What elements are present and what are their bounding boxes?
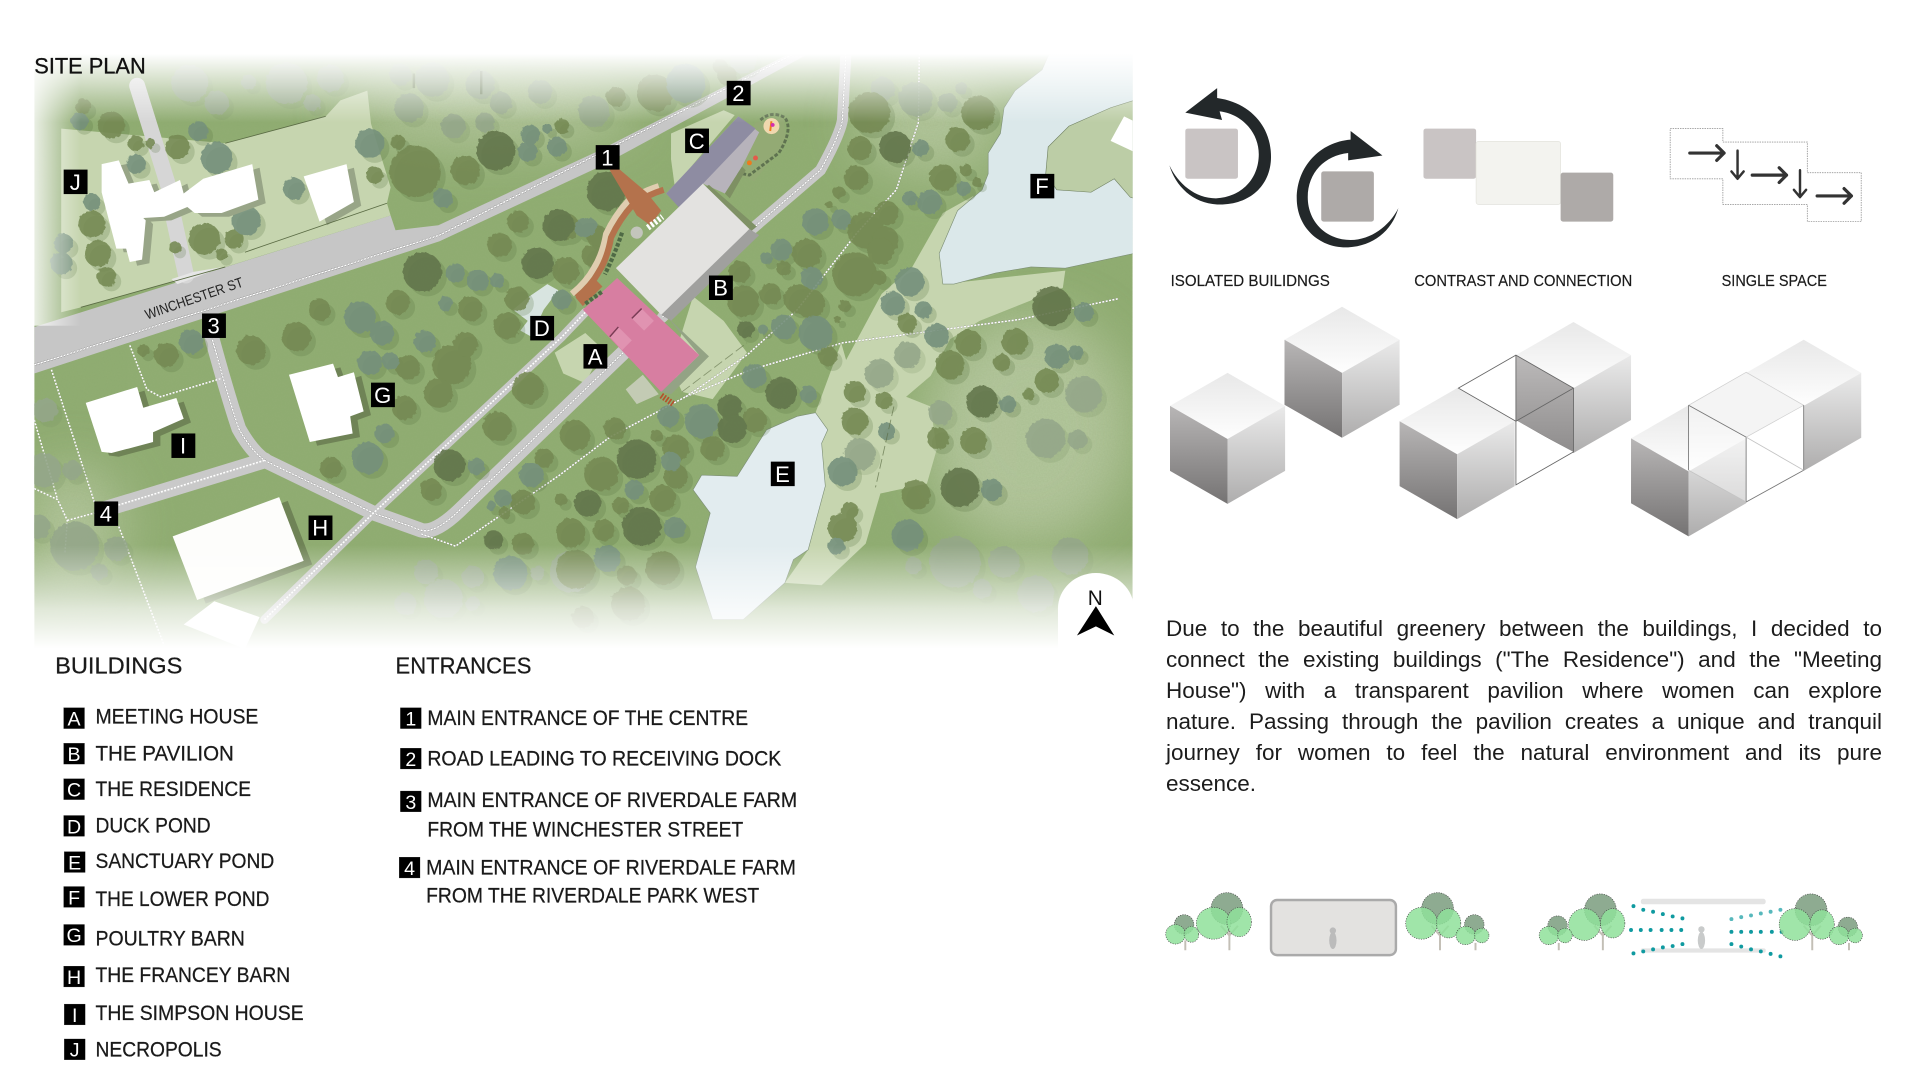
north arrow: N bbox=[1088, 587, 1103, 610]
entrance row 3: MAIN ENTRANCE OF RIVERDALE FARM bbox=[427, 789, 797, 812]
legend row B: THE PAVILION bbox=[96, 742, 234, 765]
entrance row 1: 1 bbox=[405, 709, 416, 731]
diagram: isolated buildings bbox=[1169, 88, 1398, 247]
heading: buildings: BUILDINGS bbox=[55, 652, 182, 678]
building: far right island house bbox=[1111, 116, 1134, 152]
legend row G bbox=[64, 924, 245, 950]
sections: transparent pavilion with trees bbox=[1539, 894, 1862, 958]
entrance row 1: MAIN ENTRANCE OF THE CENTRE bbox=[427, 707, 748, 730]
marker C: C bbox=[689, 129, 705, 154]
legend row H: H bbox=[67, 967, 81, 989]
marker F bbox=[1030, 174, 1054, 199]
legend row F: F bbox=[68, 887, 80, 909]
playground garden bbox=[736, 114, 788, 181]
legend row J: J bbox=[70, 1040, 80, 1062]
north arrow bbox=[1058, 573, 1135, 653]
legend row C: C bbox=[67, 780, 81, 802]
marker G: G bbox=[374, 383, 391, 408]
legend row J: NECROPOLIS bbox=[96, 1039, 222, 1062]
marker F: F bbox=[1035, 174, 1049, 199]
entrance row 4: 4 bbox=[404, 858, 415, 880]
legend row C: THE RESIDENCE bbox=[96, 778, 251, 801]
legend row G: G bbox=[66, 925, 82, 947]
entrance row 4: MAIN ENTRANCE OF RIVERDALE FARM bbox=[426, 856, 796, 879]
marker J bbox=[64, 170, 88, 195]
tree canopies bbox=[26, 47, 1107, 633]
legend row H: THE FRANCEY BARN bbox=[96, 964, 290, 987]
marker I: I bbox=[180, 434, 186, 459]
description paragraph: House") with a transparent pavilion where women can explore bbox=[1166, 678, 1882, 703]
pond E: sanctuary pond bbox=[693, 413, 828, 620]
map markers bbox=[64, 81, 1054, 541]
buildings legend bbox=[55, 652, 304, 1062]
roads bbox=[34, 44, 846, 620]
title: SITE PLAN bbox=[34, 53, 146, 78]
lighter ground washes bbox=[24, 73, 1133, 588]
entrances legend bbox=[396, 652, 797, 907]
caption: contrast and connection: CONTRAST AND CONNECTION bbox=[1414, 273, 1632, 290]
marker D: D bbox=[534, 316, 550, 341]
pond D: duck pond bbox=[513, 284, 558, 337]
tree cluster left bbox=[1166, 893, 1251, 950]
marker 2 bbox=[727, 81, 751, 106]
massing: cubes with glass pavilion bbox=[1631, 340, 1861, 536]
massing: two separate cubes bbox=[1170, 307, 1400, 504]
description paragraph bbox=[1165, 616, 1882, 796]
marker 3: 3 bbox=[208, 314, 220, 339]
building: lower white block bbox=[184, 601, 260, 640]
legend row G: POULTRY BARN bbox=[96, 927, 245, 950]
legend row D: D bbox=[67, 816, 81, 838]
loading steps near meeting house bbox=[661, 396, 673, 404]
marker E bbox=[771, 462, 795, 487]
closed building section with person bbox=[1271, 900, 1396, 955]
legend row A: A bbox=[68, 709, 82, 731]
courtyard path and plaza bbox=[572, 165, 664, 306]
tree cluster left bbox=[1539, 894, 1625, 950]
map edge fades bbox=[32, 34, 1135, 651]
panel: site plan map bbox=[24, 34, 1134, 649]
legend row F: THE LOWER POND bbox=[96, 888, 269, 911]
teal sight lines bbox=[1629, 904, 1784, 958]
marker A: A bbox=[588, 344, 603, 369]
building shadows bbox=[93, 164, 371, 604]
entrance row 3: 3 bbox=[405, 792, 416, 814]
diagram: contrast and connection bbox=[1423, 129, 1613, 222]
entrance row 2: ROAD LEADING TO RECEIVING DOCK bbox=[427, 747, 781, 770]
marker 2: 2 bbox=[732, 81, 745, 106]
legend row E: SANCTUARY POND bbox=[96, 850, 274, 873]
marker 1: 1 bbox=[601, 145, 613, 170]
diagram captions bbox=[1171, 273, 1827, 290]
sections: closed building with trees bbox=[1166, 893, 1489, 955]
building: annex beside necropolis bbox=[304, 164, 354, 222]
ground grain bbox=[34, 37, 1133, 649]
road and path dotted centrelines bbox=[34, 34, 1118, 645]
description paragraph: journey for women to feel the natural environment and its pure bbox=[1166, 740, 1882, 765]
building H: the francey barn bbox=[173, 497, 304, 600]
legend row E: E bbox=[68, 852, 81, 874]
building C: the residence bbox=[666, 116, 759, 208]
heading: entrances: ENTRANCES bbox=[396, 652, 531, 678]
marker 4 bbox=[94, 501, 118, 527]
marker 3 bbox=[202, 313, 226, 339]
entrance row 3: FROM THE WINCHESTER STREET bbox=[427, 818, 744, 841]
pavilion roof and floor with person bbox=[1641, 899, 1766, 953]
building A: meeting house bbox=[583, 278, 709, 404]
marker 1 bbox=[596, 145, 620, 170]
street label: WINCHESTER ST bbox=[143, 274, 245, 322]
map ground bbox=[34, 37, 1133, 649]
caption: isolated buildings: ISOLATED BUILIDNGS bbox=[1171, 273, 1330, 290]
building B: the pavilion bbox=[616, 184, 759, 321]
description paragraph: nature. Passing through the pavilion creates a unique and tranquil bbox=[1166, 709, 1882, 734]
description paragraph: connect the existing buildings ("The Residence") and the "Meeting bbox=[1166, 647, 1882, 672]
pond F: the lower pond bbox=[939, 37, 1134, 284]
tree cluster right bbox=[1779, 894, 1862, 950]
legend row A: MEETING HOUSE bbox=[96, 706, 258, 729]
marker A bbox=[583, 344, 607, 369]
building I: the simpson house bbox=[86, 387, 184, 453]
tree cluster right bbox=[1406, 893, 1489, 950]
massing: cubes with open wireframe link bbox=[1400, 322, 1631, 519]
entrance row 4 bbox=[399, 856, 796, 907]
marker C bbox=[685, 129, 709, 154]
legend row D: DUCK POND bbox=[96, 815, 211, 838]
caption: single space: SINGLE SPACE bbox=[1722, 273, 1827, 290]
marker H: H bbox=[312, 516, 328, 541]
marker I bbox=[171, 433, 195, 459]
marker D bbox=[530, 316, 554, 341]
building J: necropolis bbox=[102, 160, 258, 262]
marker B bbox=[709, 276, 733, 301]
entrance row 4: FROM THE RIVERDALE PARK WEST bbox=[426, 884, 759, 907]
entrance row 3 bbox=[400, 789, 797, 841]
description paragraph: essence. bbox=[1166, 771, 1256, 796]
entrance row 2: 2 bbox=[405, 749, 416, 771]
marker H bbox=[309, 516, 332, 541]
diagram: single space bbox=[1670, 129, 1861, 222]
legend row I: THE SIMPSON HOUSE bbox=[96, 1002, 304, 1025]
building G: poultry barn bbox=[289, 364, 364, 442]
island in the lower pond bbox=[1046, 100, 1134, 198]
marker E: E bbox=[775, 462, 790, 487]
marker 4: 4 bbox=[100, 502, 112, 527]
marker B: B bbox=[713, 276, 728, 301]
marker J: J bbox=[70, 170, 81, 195]
pale lawns bbox=[61, 91, 1065, 585]
description paragraph: Due to the beautiful greenery between the buildings, I decided to bbox=[1166, 616, 1882, 641]
legend row B: B bbox=[68, 744, 81, 766]
legend row I: I bbox=[72, 1005, 77, 1027]
forest linework bbox=[81, 71, 894, 487]
